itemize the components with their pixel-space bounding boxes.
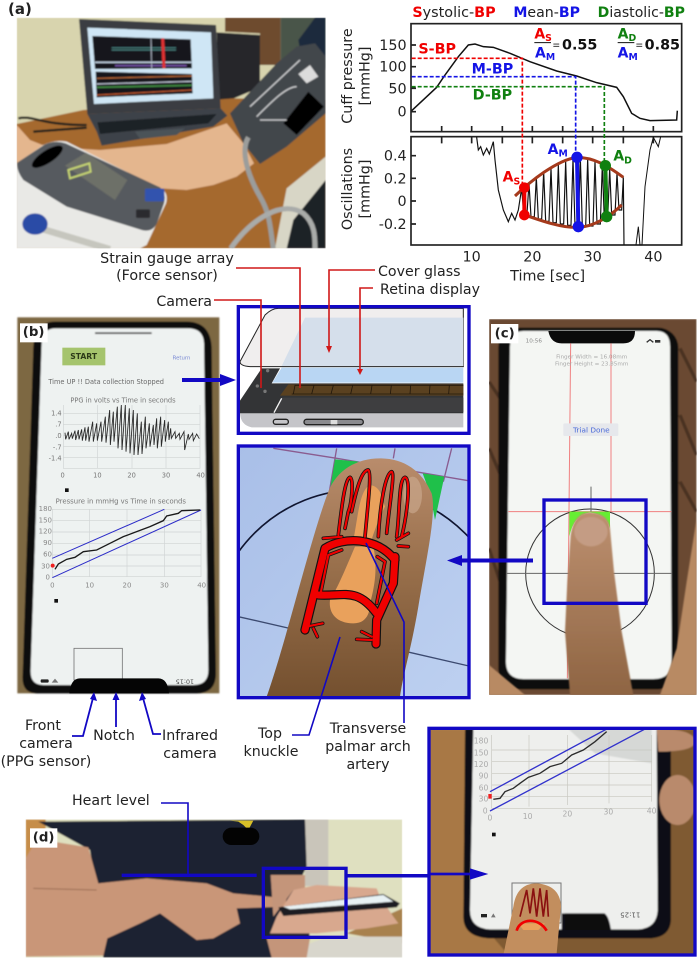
arrow: from phone to finger inset xyxy=(447,555,533,566)
trial done button: Trial Done xyxy=(572,425,610,434)
curve labels: S-BP, M-BP, D-BP: M-BP xyxy=(472,62,513,78)
ratio: diastolic amplitude over mean amplitude: D xyxy=(628,33,636,44)
legend: systolic, mean and diastolic blood pressure: Diastolic-BP xyxy=(598,5,685,21)
PPG chart: 10 xyxy=(93,472,102,480)
chart axis labels: 60 xyxy=(479,783,488,792)
ratio: diastolic amplitude over mean amplitude: A xyxy=(618,45,628,61)
inset: finger placed over camera box xyxy=(428,728,696,956)
pressure chart xyxy=(39,497,206,589)
x axis ticks and title: 30 xyxy=(584,250,602,266)
clock: 10:56 xyxy=(526,339,542,345)
arrow: from phone screen to display layers xyxy=(182,374,236,386)
y axis ticks: 0 xyxy=(398,105,407,121)
panel label: (d): (d) xyxy=(33,831,55,846)
y axis title: cuff pressure: Cuff pressure xyxy=(340,28,356,124)
label: front camera: Front xyxy=(25,718,61,734)
dashed guide: mean xyxy=(412,77,576,153)
strain gauge array xyxy=(280,384,463,396)
finger size readout: Finger Width = 16.08mm xyxy=(556,354,628,360)
legend: systolic, mean and diastolic blood pressure: Mean-BP xyxy=(513,5,580,21)
PPG chart: 1.4 xyxy=(51,410,62,418)
ratio: systolic amplitude over mean amplitude: = xyxy=(552,41,560,52)
ratio: diastolic amplitude over mean amplitude: M xyxy=(628,52,638,63)
label: front camera xyxy=(1,718,91,770)
pressure chart: 0 xyxy=(50,581,55,589)
ratio: systolic amplitude over mean amplitude xyxy=(534,26,597,63)
amplitude marker: diastolic xyxy=(600,149,632,222)
oscillation envelope xyxy=(515,157,623,227)
PPG chart: PPG in volts vs Time in seconds xyxy=(70,396,176,404)
chart axis labels: 180 xyxy=(474,737,488,746)
amplitude marker: diastolic: A xyxy=(613,149,624,165)
ratio: diastolic amplitude over mean amplitude: A xyxy=(618,26,628,42)
curve labels: S-BP, M-BP, D-BP xyxy=(418,42,513,104)
leader: transverse palmar arch artery xyxy=(366,543,404,723)
PPG chart: -1.4 xyxy=(49,454,62,462)
start button: START xyxy=(70,352,98,361)
chart: cuff pressure and oscillations versus time xyxy=(340,5,685,285)
label: strain gauge array: (Force sensor) xyxy=(116,268,218,284)
frame xyxy=(238,446,469,698)
label: infrared camera: camera xyxy=(163,746,217,762)
PPG chart: 30 xyxy=(162,472,170,480)
status icons xyxy=(647,340,660,343)
inset: finger with artery anatomy overlay xyxy=(236,444,471,700)
label: transverse palmar arch artery: artery xyxy=(346,757,390,773)
label: transverse palmar arch artery: Transverse xyxy=(329,721,406,737)
label: top knuckle: knuckle xyxy=(244,744,298,760)
inverted clock: 10:15 xyxy=(176,677,194,684)
bones xyxy=(330,485,385,623)
y axis ticks: 50 xyxy=(388,81,407,97)
ratio: systolic amplitude over mean amplitude: M xyxy=(546,52,555,63)
connector: zoom region to inset xyxy=(346,874,429,878)
chart axis labels: 10 xyxy=(523,812,533,821)
start button xyxy=(62,348,105,365)
y axis ticks: 150 xyxy=(379,38,407,54)
label: top knuckle xyxy=(244,726,298,760)
cover glass layer xyxy=(240,308,463,367)
curve labels: S-BP, M-BP, D-BP: S-BP xyxy=(418,42,456,58)
panel label: (c) xyxy=(491,324,518,343)
chart axis labels: 20 xyxy=(562,810,572,819)
amplitude marker: systolic xyxy=(503,170,530,220)
panel d: person holding phone at heart level xyxy=(26,819,402,958)
finger with artery overlay xyxy=(503,883,561,955)
shirt logo xyxy=(223,821,259,845)
arrow: front camera xyxy=(72,692,97,736)
label: front camera: camera xyxy=(19,736,73,752)
pressure chart: 180 xyxy=(39,505,52,513)
x axis ticks and title: 10 xyxy=(463,250,481,266)
chart axis labels: 0 xyxy=(488,814,493,823)
inverted clock: 11:25 xyxy=(620,911,640,919)
amplitude marker: systolic: S xyxy=(513,176,520,187)
pressure chart: Pressure in mmHg vs Time in seconds xyxy=(56,497,187,505)
y axis ticks: 0.2 xyxy=(384,171,407,187)
leader: heart level xyxy=(161,803,188,875)
dashed guide: diastolic xyxy=(412,87,604,163)
status icons xyxy=(41,679,58,683)
heart level line xyxy=(122,870,257,880)
finger xyxy=(267,458,433,697)
chart axis labels xyxy=(474,737,657,823)
label: infrared camera xyxy=(162,728,218,762)
curve labels: S-BP, M-BP, D-BP: D-BP xyxy=(473,88,512,104)
black dot xyxy=(492,833,496,836)
notch xyxy=(548,331,635,343)
chart grid xyxy=(492,735,652,808)
leader: retina display xyxy=(357,288,373,375)
PPG chart: 20 xyxy=(127,472,136,480)
status message: Time UP !! Data collection Stopped xyxy=(47,378,164,386)
pressure chart: 40 xyxy=(197,581,206,589)
ratio: diastolic amplitude over mean amplitude xyxy=(618,26,680,63)
label: top knuckle: Top xyxy=(257,726,282,742)
notch xyxy=(69,678,169,693)
legend: systolic, mean and diastolic blood pressure: Systolic-BP xyxy=(412,5,496,21)
chart frames and tick marks xyxy=(411,24,682,245)
dashed guide: systolic xyxy=(412,58,522,183)
y axis title: cuff pressure xyxy=(340,28,373,124)
finger size readout: Finger Height = 23.85mm xyxy=(555,362,629,368)
chart axis labels: 0 xyxy=(483,806,488,815)
ratio: diastolic amplitude over mean amplitude: 0.85 xyxy=(645,37,680,53)
arrow: notch xyxy=(112,692,120,727)
pressure chart: 30 xyxy=(160,581,169,589)
target circle and crosshair xyxy=(507,487,672,638)
y axis title: cuff pressure: [mmHg] xyxy=(357,47,373,105)
panel label: (b): (b) xyxy=(23,325,45,340)
leader: camera xyxy=(214,300,261,388)
green corners xyxy=(569,512,610,537)
y axis title: oscillations: [mmHg] xyxy=(357,160,373,218)
frame xyxy=(238,307,469,433)
frame xyxy=(429,728,695,955)
x axis ticks and title: 20 xyxy=(523,250,541,266)
y axis ticks: 0.4 xyxy=(384,149,407,165)
ratio: systolic amplitude over mean amplitude: S xyxy=(545,33,552,44)
y axis ticks: 0 xyxy=(398,194,407,210)
chart axis labels: 30 xyxy=(479,795,488,804)
legend: systolic, mean and diastolic blood pressure xyxy=(412,5,685,21)
amplitude marker: systolic: A xyxy=(503,170,513,186)
leader: cover glass xyxy=(326,270,375,353)
panel b: phone showing PPG and pressure charts xyxy=(17,317,219,693)
label: strain gauge array xyxy=(100,251,234,284)
oscillation trace xyxy=(477,137,624,245)
label: retina display: Retina display xyxy=(380,282,480,298)
chart axis labels: 150 xyxy=(474,748,488,757)
panel a: photo of laptop, cuff and blood pressure monitor xyxy=(17,18,326,249)
return link: Return xyxy=(173,355,190,361)
label: notch: Notch xyxy=(93,728,135,744)
panel label: (c): (c) xyxy=(495,326,515,341)
y axis ticks: -0.2 xyxy=(379,217,407,233)
pressure chart: 90 xyxy=(43,539,52,547)
panel c: phone measuring fingertip xyxy=(489,319,697,695)
phone edge with buttons xyxy=(240,413,463,427)
panel label: (b) xyxy=(20,323,48,342)
PPG chart: .0 xyxy=(55,432,62,440)
black dot xyxy=(54,599,58,603)
PPG chart xyxy=(49,396,205,480)
PPG chart: -.7 xyxy=(53,443,62,451)
label: strain gauge array: Strain gauge array xyxy=(100,251,234,267)
amplitude marker: mean xyxy=(548,142,584,232)
retina display layer xyxy=(272,368,463,383)
panel label: (a): (a) xyxy=(8,0,32,18)
y axis ticks: 100 xyxy=(379,60,407,76)
chart axis labels: 30 xyxy=(603,807,613,816)
supporting hand xyxy=(489,518,697,695)
artery network xyxy=(305,470,408,644)
label: front camera: (PPG sensor) xyxy=(1,754,91,770)
y axis title: oscillations: Oscillations xyxy=(340,148,356,230)
red finger guide lines xyxy=(508,343,671,678)
cuff pressure curve xyxy=(412,44,677,121)
trial done button xyxy=(563,423,618,436)
camera target box xyxy=(74,648,122,680)
y axis title: oscillations xyxy=(340,148,373,230)
leader: top knuckle xyxy=(292,637,340,735)
panel label: (d) xyxy=(30,828,57,848)
phone body and bezel xyxy=(240,368,463,413)
zoom region square xyxy=(544,500,646,603)
y axis ticks xyxy=(379,38,407,233)
inset: exploded phone display layers xyxy=(238,307,469,433)
chart axis labels: 90 xyxy=(479,772,488,781)
arrow: infrared camera xyxy=(139,692,161,734)
finger size readout xyxy=(556,354,628,366)
status icons xyxy=(481,913,496,917)
black dot xyxy=(65,488,69,492)
pressure chart: 0 xyxy=(46,573,50,581)
PPG chart: .7 xyxy=(55,421,62,429)
pressure chart: 30 xyxy=(41,562,50,570)
x axis ticks and title: 40 xyxy=(644,250,662,266)
label: heart level: Heart level xyxy=(72,793,150,809)
camera box xyxy=(512,883,561,923)
pressure chart: 120 xyxy=(39,528,52,536)
x axis ticks and title: Time [sec] xyxy=(509,269,585,285)
pressure chart: 60 xyxy=(43,551,52,559)
ratio: diastolic amplitude over mean amplitude: = xyxy=(635,41,643,52)
PPG chart: 40 xyxy=(196,472,205,480)
amplitude marker: mean: M xyxy=(558,149,568,160)
pressure chart: 150 xyxy=(39,516,52,524)
PPG chart: 0 xyxy=(61,472,65,480)
chart axis labels: 40 xyxy=(647,806,657,815)
ratio: systolic amplitude over mean amplitude: A xyxy=(534,26,545,42)
amplitude marker: mean: A xyxy=(548,142,558,158)
label: infrared camera: Infrared xyxy=(162,728,218,744)
chart guide lines and trace xyxy=(488,729,645,811)
arrow xyxy=(428,868,488,880)
finger xyxy=(565,512,633,695)
label: cover glass: Cover glass xyxy=(378,264,460,280)
leader: strain gauge array xyxy=(236,268,300,388)
chart axis labels: 120 xyxy=(474,760,488,769)
label: transverse palmar arch artery: palmar arch xyxy=(325,739,411,755)
pressure chart: 10 xyxy=(85,581,94,589)
zoom region square xyxy=(263,868,346,937)
fingernail highlight xyxy=(403,477,422,513)
ratio: systolic amplitude over mean amplitude: A xyxy=(535,45,546,61)
amplitude marker: diastolic: D xyxy=(624,155,632,166)
x axis ticks and title xyxy=(463,250,662,285)
ratio: systolic amplitude over mean amplitude: 0.55 xyxy=(562,37,597,53)
label: transverse palmar arch artery xyxy=(325,721,411,773)
label: camera: Camera xyxy=(156,294,212,310)
pressure chart: 20 xyxy=(123,581,131,589)
